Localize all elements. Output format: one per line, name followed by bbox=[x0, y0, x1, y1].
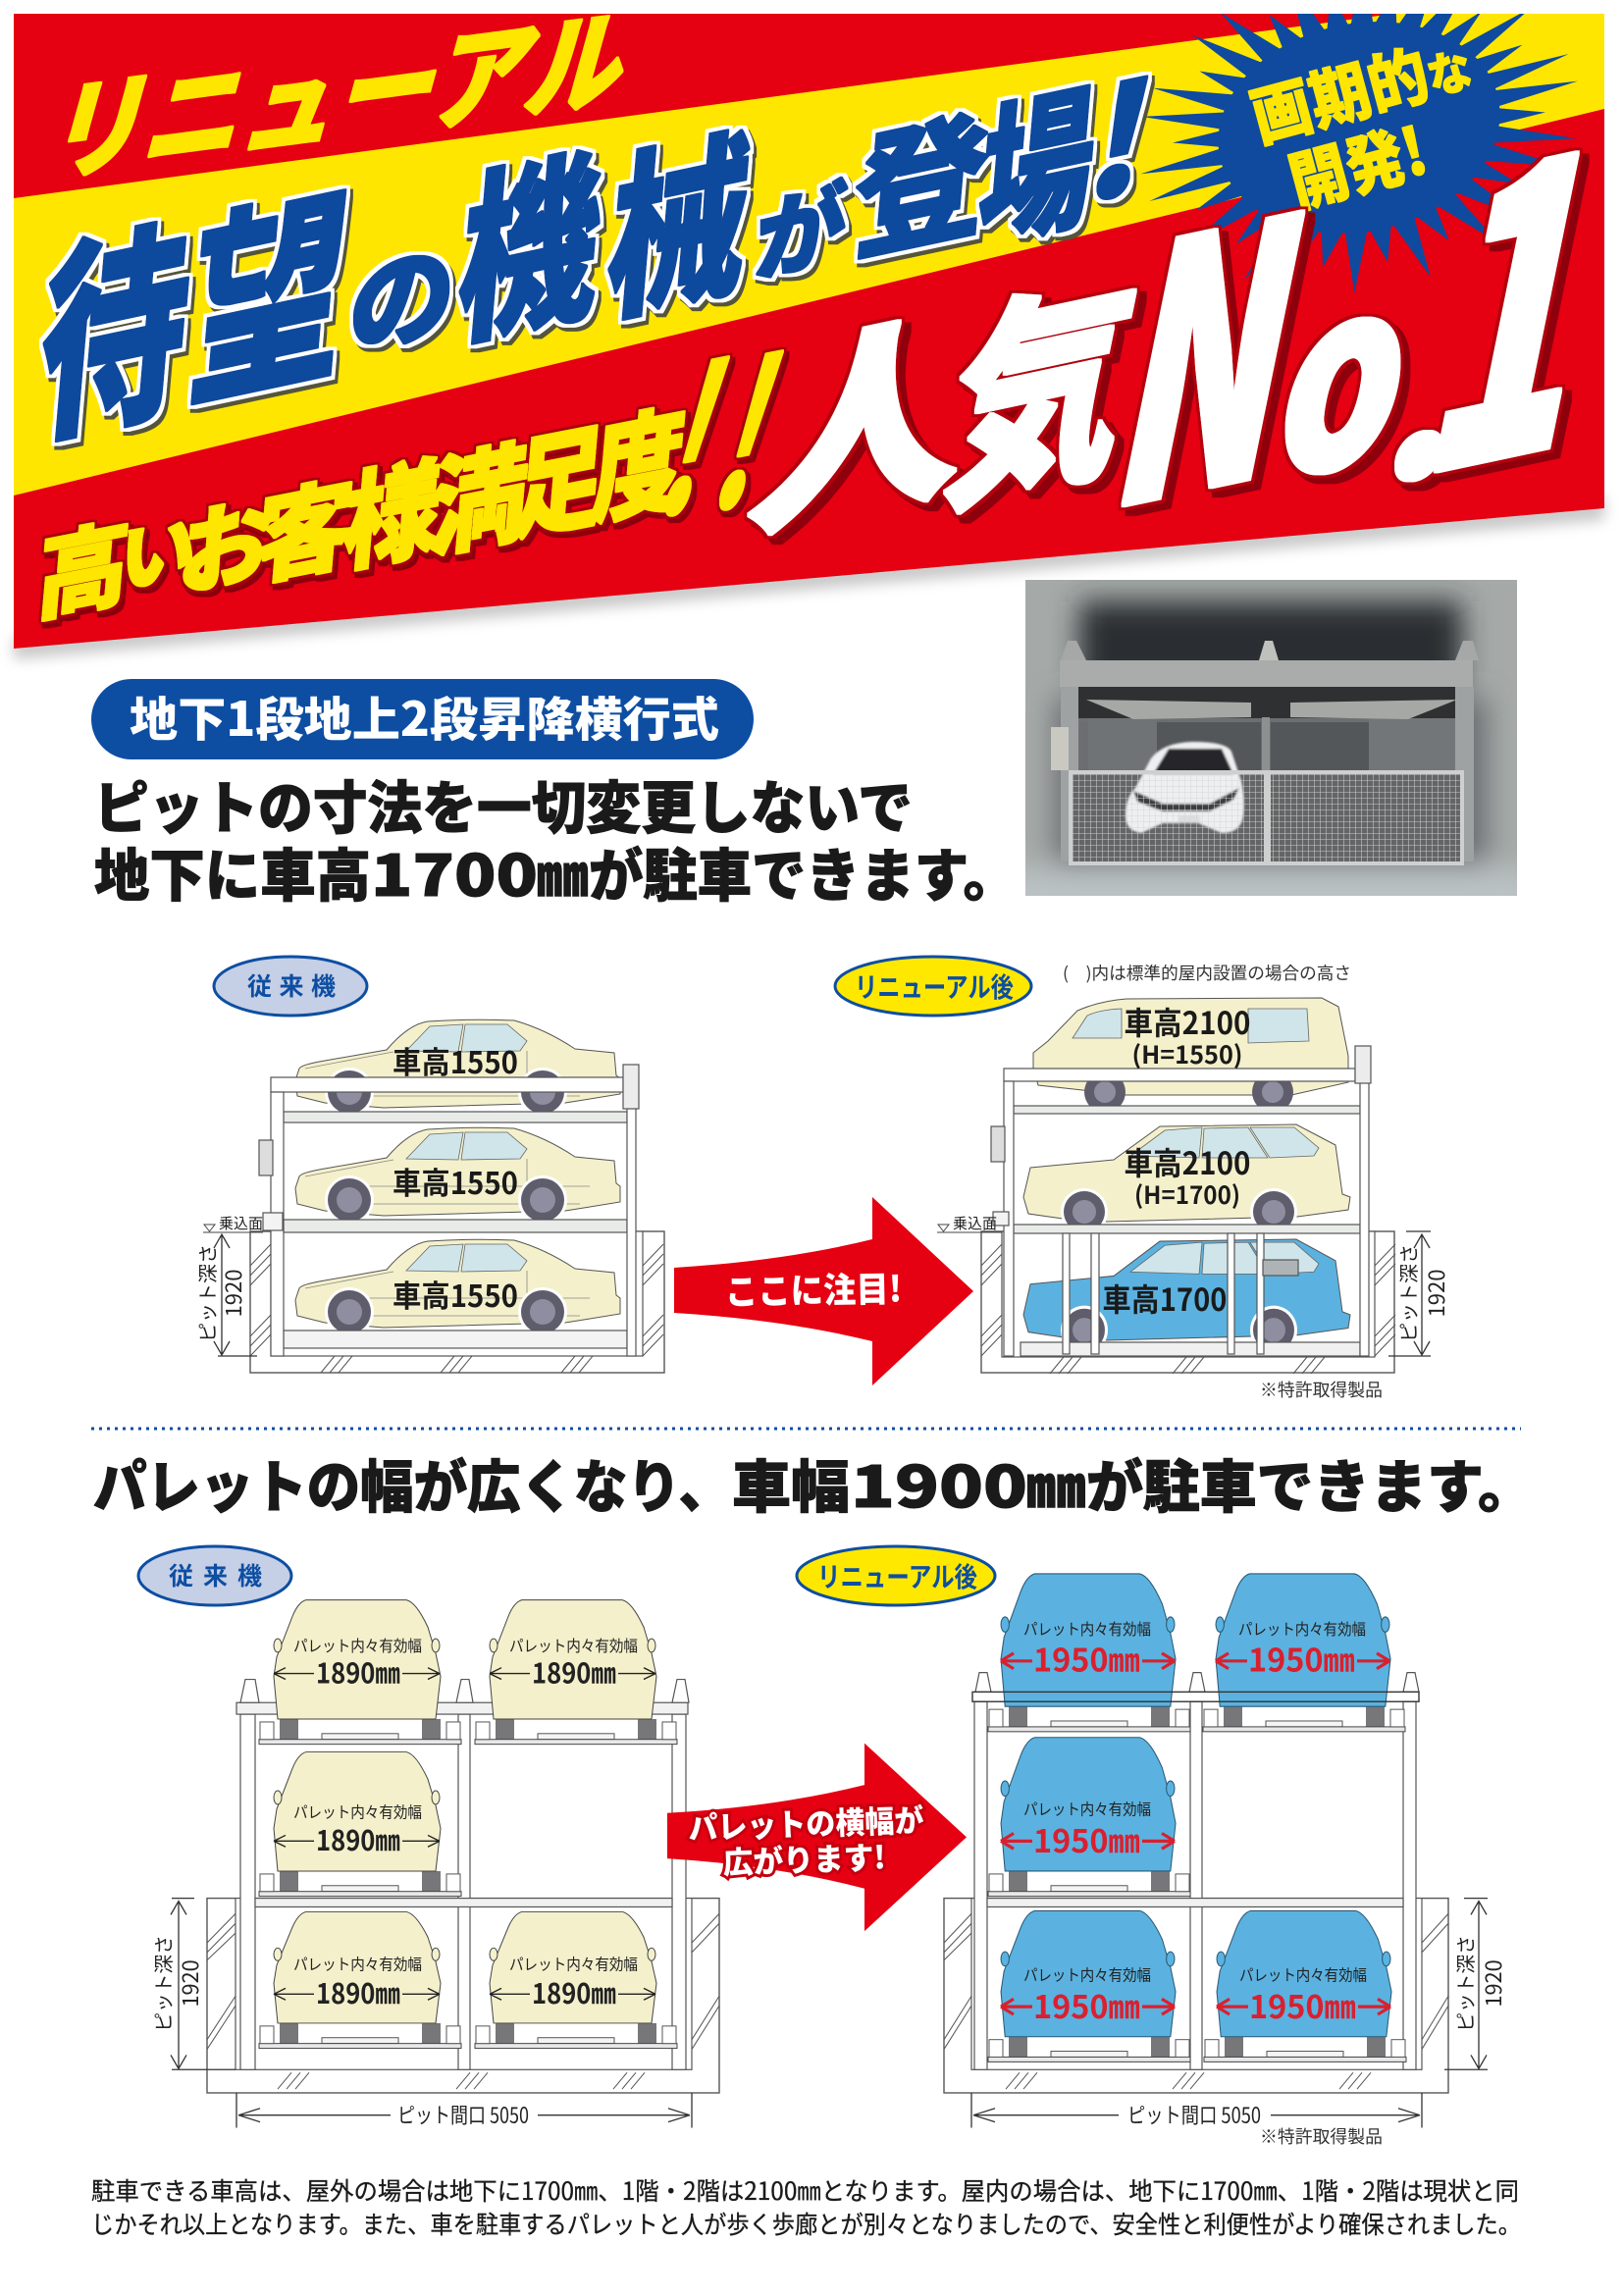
heading: 待望の機械が登場! bbox=[29, 13, 1176, 489]
car: lower left bbox=[988, 1910, 1190, 2061]
car: lower right: 1890㎜ bbox=[532, 1972, 616, 2012]
arrow: ここに注目!: ここに注目! bbox=[725, 1261, 902, 1316]
burst badge bbox=[1140, 14, 1578, 292]
heading: 高いお客様満足度!!: ! bbox=[688, 268, 820, 570]
car: middle bbox=[259, 1752, 461, 1897]
pit outline bbox=[981, 1231, 1395, 1374]
car: lower left: 1950㎜ bbox=[1033, 1982, 1140, 2028]
section heading: パレット幅 bbox=[93, 1441, 1535, 1524]
car height labels bbox=[1103, 999, 1250, 1321]
heading: 高いお客様満足度!!: 足 bbox=[508, 386, 612, 565]
blue car bbox=[1023, 1239, 1350, 1355]
pit depth dimension: ピット深さ bbox=[1450, 1935, 1479, 2032]
pit depth dimension: 1920 bbox=[1420, 1270, 1451, 1317]
pit depth dimension: ピット深さ bbox=[148, 1935, 177, 2032]
intro text bbox=[94, 762, 1018, 913]
car: lower right: パレット内々有効幅 bbox=[509, 1953, 638, 1975]
car: upper right: パレット内々有効幅 bbox=[1238, 1617, 1366, 1640]
car: upper right: 1950㎜ bbox=[1248, 1636, 1355, 1682]
note: patent: ※特許取得製品 bbox=[1260, 2123, 1383, 2149]
car height labels: 車高1550 bbox=[393, 1038, 518, 1082]
heading: 人気No.1: 気 bbox=[922, 201, 1165, 557]
label oval: リニューアル後 (width diagram): リニューアル後 bbox=[817, 1556, 977, 1595]
pit depth dimension: 1920 bbox=[217, 1270, 248, 1317]
car: middle bbox=[988, 1738, 1190, 1897]
photo of parking machine bbox=[1025, 580, 1517, 896]
section heading: パレット幅: パレットの幅が広くなり、 bbox=[93, 1441, 732, 1524]
diagram: conventional machine front view bbox=[148, 1600, 719, 2130]
upper beam bbox=[972, 1692, 1419, 1701]
heading: 待望の機械が登場!: 望 bbox=[180, 119, 360, 448]
diagram: conventional machine side view bbox=[192, 1019, 664, 1373]
heading: 待望の機械が登場!: 機 bbox=[449, 86, 612, 385]
car: upper left: パレット内々有効幅 bbox=[1023, 1617, 1151, 1640]
car height labels: 車高2100 bbox=[1125, 999, 1250, 1044]
label oval: リニューアル後 (height diagram): リニューアル後 bbox=[855, 966, 1014, 1006]
heading: 待望の機械が登場!: ! bbox=[1072, 13, 1176, 248]
car height labels: 車高1550 bbox=[393, 1159, 518, 1203]
heading: 高いお客様満足度!!: ! bbox=[634, 274, 766, 576]
heading: 待望の機械が登場!: 場 bbox=[971, 33, 1105, 281]
car height labels: 車高1550 bbox=[393, 1272, 518, 1316]
arrow: パレットの横幅が広がります!: パレットの横幅が bbox=[688, 1796, 924, 1849]
label oval: 従来機 (height diagram) bbox=[214, 957, 367, 1016]
car: lower left: 1890㎜ bbox=[316, 1972, 400, 2012]
car height labels: (H=1700) bbox=[1134, 1176, 1240, 1212]
pit outline bbox=[944, 1899, 1448, 2093]
banner shadow bbox=[14, 496, 1604, 659]
car: lower right: パレット内々有効幅 bbox=[1239, 1963, 1367, 1985]
car: middle: 1890㎜ bbox=[316, 1819, 400, 1859]
burst text: 画期的な開発!: 開発! bbox=[1278, 99, 1436, 227]
intro text: ㎜ bbox=[537, 830, 589, 913]
label oval: 従来機 (width diagram) bbox=[138, 1546, 291, 1605]
pit depth dimension: 1920 bbox=[1478, 1959, 1508, 2008]
car: lower left: パレット内々有効幅 bbox=[1023, 1963, 1151, 1985]
pit outline bbox=[250, 1231, 664, 1373]
intro text: ピットの寸法を一切変更しないで bbox=[94, 762, 913, 845]
heading: 高いお客様満足度!!: 満 bbox=[424, 403, 535, 581]
dotted divider bbox=[91, 1427, 1521, 1431]
note: patent: ※特許取得製品 bbox=[1260, 1377, 1383, 1402]
blue pill heading: 地下1段地上2段昇降横行式 bbox=[130, 681, 719, 750]
frame bbox=[974, 1673, 1419, 2069]
car height labels: 車高1700 bbox=[1103, 1276, 1227, 1321]
pit width dimension bbox=[236, 2093, 692, 2130]
car: lower left: パレット内々有効幅 bbox=[293, 1953, 422, 1975]
fence in photo bbox=[1071, 772, 1462, 863]
pit depth dimension bbox=[148, 1899, 236, 2069]
car: upper right bbox=[1203, 1574, 1405, 1732]
car: upper right: パレット内々有効幅 bbox=[509, 1634, 638, 1656]
intro text: 地下に車高 bbox=[94, 830, 371, 913]
heading: 高いお客様満足度!!: 高 bbox=[32, 488, 136, 641]
car: upper left: 1950㎜ bbox=[1033, 1636, 1140, 1682]
car: middle: パレット内々有効幅 bbox=[293, 1800, 422, 1823]
wagon bbox=[1023, 1124, 1350, 1235]
heading: 人気No.1 bbox=[732, 0, 1623, 613]
label oval: 従来機 (height diagram): 従来機 bbox=[247, 967, 336, 1003]
heading: 高いお客様満足度!!: お bbox=[175, 463, 279, 616]
boarding level mark: 乗込面 bbox=[219, 1213, 263, 1233]
frame bbox=[259, 1065, 639, 1356]
arrow: ここに注目! bbox=[674, 1197, 973, 1385]
car: upper left: 1890㎜ bbox=[316, 1652, 400, 1692]
pit depth dimension: ピット深さ bbox=[192, 1244, 221, 1342]
heading: 高いお客様満足度!!: い bbox=[116, 484, 201, 611]
heading: 人気No.1: o bbox=[1252, 159, 1449, 556]
car: upper right bbox=[475, 1600, 677, 1745]
banner background bbox=[14, 14, 1604, 652]
car: upper left bbox=[988, 1574, 1190, 1732]
car: lower right: 1950㎜ bbox=[1249, 1982, 1356, 2028]
label oval: リニューアル後 (height diagram) bbox=[835, 957, 1031, 1016]
heading: 待望の機械が登場!: が bbox=[751, 150, 852, 302]
car: upper left bbox=[259, 1600, 461, 1745]
diagram: renewed machine side view bbox=[937, 998, 1451, 1374]
frame bbox=[991, 1046, 1371, 1356]
pit width dimension: ピット間口 5050 bbox=[397, 2100, 529, 2130]
section heading: パレット幅: が駐車できます。 bbox=[1086, 1441, 1535, 1524]
arrow: パレットの横幅が広がります! bbox=[667, 1744, 967, 1931]
intro text: 1700 bbox=[371, 830, 538, 913]
car: upper left: パレット内々有効幅 bbox=[293, 1634, 422, 1656]
heading: 待望の機械が登場!: 登 bbox=[846, 62, 999, 290]
car height labels: (H=1550) bbox=[1132, 1036, 1242, 1071]
burst text: 画期的な開発!: 画期的な bbox=[1239, 12, 1480, 161]
frame bbox=[236, 1680, 689, 2069]
note: indoor height: ( )内は標準的屋内設置の場合の高さ bbox=[1063, 961, 1351, 985]
burst text: 画期的な開発! bbox=[1239, 12, 1480, 227]
pit depth dimension: ピット深さ bbox=[1393, 1244, 1422, 1342]
heading: 高いお客様満足度!! bbox=[32, 268, 820, 641]
car: lower right bbox=[1204, 1910, 1406, 2061]
arrow: パレットの横幅が広がります!: 広がります! bbox=[722, 1833, 886, 1884]
heading: 人気No.1: . bbox=[1366, 221, 1501, 548]
footer paragraph: じかそれ以上となります。また、車を駐車するパレットと人が歩く歩廊とが別々となりましたので、安全性と利便性がより確保されました。 bbox=[91, 2206, 1521, 2241]
car: middle: パレット内々有効幅 bbox=[1023, 1798, 1151, 1820]
van bbox=[1033, 998, 1348, 1113]
pit depth dimension bbox=[192, 1234, 257, 1356]
cars bbox=[295, 1019, 620, 1336]
car: lower right bbox=[475, 1911, 677, 2049]
section heading: パレット幅: 車幅 bbox=[732, 1441, 850, 1524]
heading: 人気No.1: N bbox=[1083, 60, 1352, 613]
car in photo bbox=[1126, 742, 1244, 833]
heading: 人気No.1: 人 bbox=[732, 235, 1005, 584]
diagram: renewed machine front view bbox=[944, 1574, 1508, 2130]
boarding level mark: 乗込面 bbox=[953, 1213, 997, 1233]
footer paragraph: 駐車できる車高は、屋外の場合は地下に1700㎜、1階・2階は2100㎜となります。屋内の場合は、地下に1700㎜、1階・2階は現状と同 bbox=[91, 2172, 1519, 2208]
pit width dimension bbox=[971, 2093, 1422, 2130]
footer paragraph bbox=[91, 2172, 1521, 2241]
heading: 高いお客様満足度!!: 客 bbox=[250, 444, 361, 606]
car: upper right: 1890㎜ bbox=[532, 1652, 616, 1692]
label oval: リニューアル後 (width diagram) bbox=[797, 1546, 995, 1605]
car: lower left bbox=[259, 1911, 461, 2049]
heading: 待望の機械が登場!: 待 bbox=[29, 148, 203, 489]
heading: 高いお客様満足度!!: 度 bbox=[587, 367, 693, 549]
section heading: パレット幅: 1900 bbox=[851, 1441, 1027, 1524]
pit depth dimension bbox=[1388, 1231, 1451, 1356]
heading: 待望の機械が登場!: 械 bbox=[600, 70, 761, 359]
pit width dimension: ピット間口 5050 bbox=[1127, 2100, 1261, 2130]
pit depth dimension bbox=[1444, 1899, 1508, 2069]
intro text: が駐車できます。 bbox=[589, 830, 1018, 913]
car: middle: 1950㎜ bbox=[1033, 1816, 1140, 1862]
heading: 高いお客様満足度!!: 様 bbox=[339, 420, 447, 595]
heading: 待望の機械が登場!: の bbox=[343, 203, 463, 382]
section heading: パレット幅: ㎜ bbox=[1026, 1441, 1086, 1524]
boarding level mark bbox=[937, 1213, 1002, 1233]
pit depth dimension: 1920 bbox=[175, 1959, 205, 2008]
car height labels: 車高2100 bbox=[1125, 1139, 1250, 1184]
car height labels bbox=[393, 1038, 518, 1316]
pit outline bbox=[207, 1899, 719, 2093]
label oval: 従来機 (width diagram): 従来機 bbox=[169, 1557, 262, 1592]
